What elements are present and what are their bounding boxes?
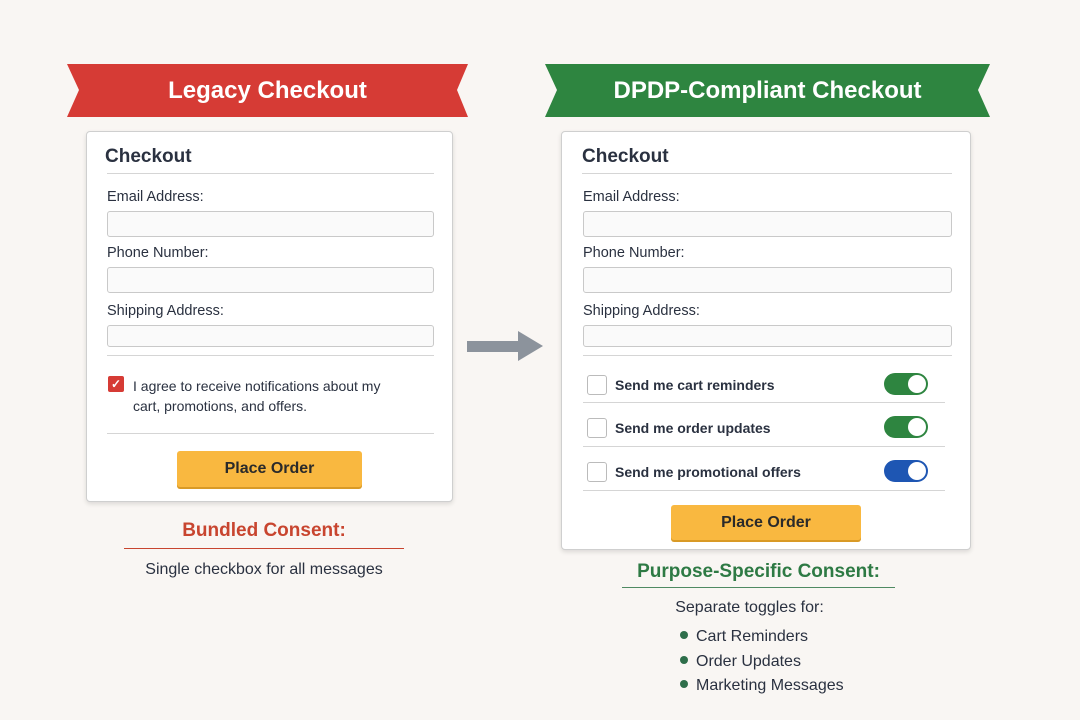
field: shipping: Shipping Address: (107, 303, 224, 319)
button: place order (671, 505, 861, 540)
banner: legacy checkout (67, 64, 468, 117)
arrow (467, 331, 543, 361)
field: phone: Phone Number: (583, 245, 685, 261)
consent row: cart reminders (587, 373, 928, 395)
caption: purpose-specific consent: Separate toggles for: (675, 599, 824, 616)
form heading: Checkout (582, 146, 669, 167)
caption: bundled consent (124, 520, 404, 578)
caption: bundled consent: Bundled Consent: (182, 520, 346, 541)
field: shipping: Shipping Address: (583, 303, 700, 319)
caption: purpose-specific consent: Purpose-Specific Consent: (637, 561, 880, 582)
bundled consent text: cart, promotions, and offers. (133, 398, 307, 414)
bundled consent text: I agree to receive notifications about my (133, 378, 380, 394)
consent row: order updates (587, 416, 928, 438)
caption: purpose-specific consent (622, 561, 895, 694)
panel: DPDP-compliant checkout form (561, 131, 971, 550)
banner: legacy checkout: Legacy Checkout (168, 77, 367, 104)
bullet list: Marketing Messages (696, 677, 844, 694)
consent row: promotional offers: Send me promotional offers (615, 464, 801, 480)
panel: legacy checkout form (86, 131, 453, 502)
bullet list: Cart Reminders (696, 628, 808, 645)
consent row: promotional offers (587, 460, 928, 482)
field: phone: Phone Number: (107, 245, 209, 261)
field: email: Email Address: (583, 189, 680, 205)
checked bundled consent checkbox: ✓ (111, 377, 121, 391)
button: place order: Place Order (721, 514, 811, 530)
banner: DPDP-compliant checkout: DPDP-Compliant Checkout (613, 77, 922, 104)
consent row: cart reminders: Send me cart reminders (615, 377, 775, 393)
checked bundled consent checkbox (108, 376, 124, 392)
bundled consent text (133, 378, 380, 414)
field: email: Email Address: (107, 189, 204, 205)
consent row: order updates: Send me order updates (615, 420, 771, 436)
bullet list (680, 628, 844, 694)
banner: DPDP-compliant checkout (545, 64, 990, 117)
button: place order (177, 451, 362, 487)
bullet list: Order Updates (696, 652, 801, 670)
form heading: Checkout (105, 146, 192, 167)
button: place order: Place Order (225, 460, 314, 477)
caption: bundled consent: Single checkbox for all messages (145, 561, 383, 578)
